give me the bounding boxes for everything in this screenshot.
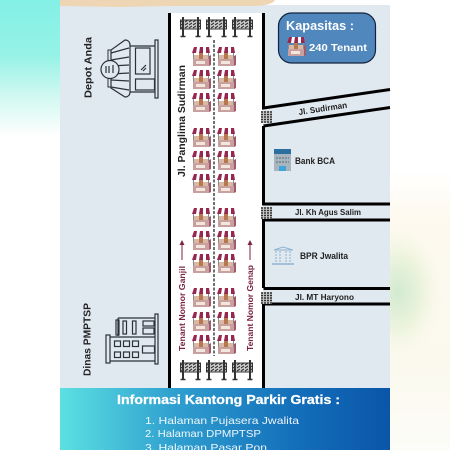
- street label: Jl. Kh Agus Salim: Jl. Kh Agus Salim: [295, 207, 361, 217]
- torn paper strip: [60, 0, 275, 7]
- callout: capacity: 240 Tenant: [309, 43, 368, 54]
- road label: Jl. Panglima Sudirman: Jl. Panglima Sudirman: [176, 65, 188, 177]
- panel: free parking information: [60, 388, 390, 450]
- label: Tenant Nomor Ganjil with arrow: Tenant Nomor Ganjil: [178, 266, 187, 351]
- street label: Jl. Sudirman: Jl. Sudirman: [298, 100, 348, 117]
- icon: Dinas PMPTSP building: [106, 314, 158, 364]
- map panel: [60, 5, 390, 389]
- icon: Depot store: [101, 40, 158, 98]
- bottom barriers: [180, 360, 252, 380]
- parking list: [145, 415, 299, 450]
- icon: BPR Jwalita building: [272, 247, 294, 264]
- label: Bank BCA: Bank BCA: [295, 156, 335, 166]
- label: Tenant Nomor Genap with arrow: Tenant Nomor Genap: [246, 265, 255, 351]
- label: Depot Anda: Depot Anda: [84, 37, 94, 98]
- tenant stalls: [192, 47, 236, 354]
- parking list: 1. Halaman Pujasera Jwalita: [145, 415, 299, 427]
- label: BPR Jwalita: BPR Jwalita: [300, 251, 349, 261]
- road surface: [170, 13, 263, 389]
- road walls: [170, 13, 390, 388]
- centre dashed line: [213, 40, 215, 356]
- label: Dinas PMPTSP: Dinas PMPTSP: [82, 303, 94, 376]
- callout: capacity: Kapasitas :: [286, 19, 354, 33]
- top barriers: [180, 17, 252, 36]
- callout: capacity: [278, 13, 376, 63]
- street label: Jl. MT Haryono: Jl. MT Haryono: [295, 292, 354, 302]
- heading: Informasi Kantong Parkir Gratis :: [117, 392, 340, 407]
- side street crossings: [261, 111, 272, 304]
- parking list: 2. Halaman DPMPTSP: [145, 428, 261, 440]
- icon: Bank BCA building: [274, 149, 291, 171]
